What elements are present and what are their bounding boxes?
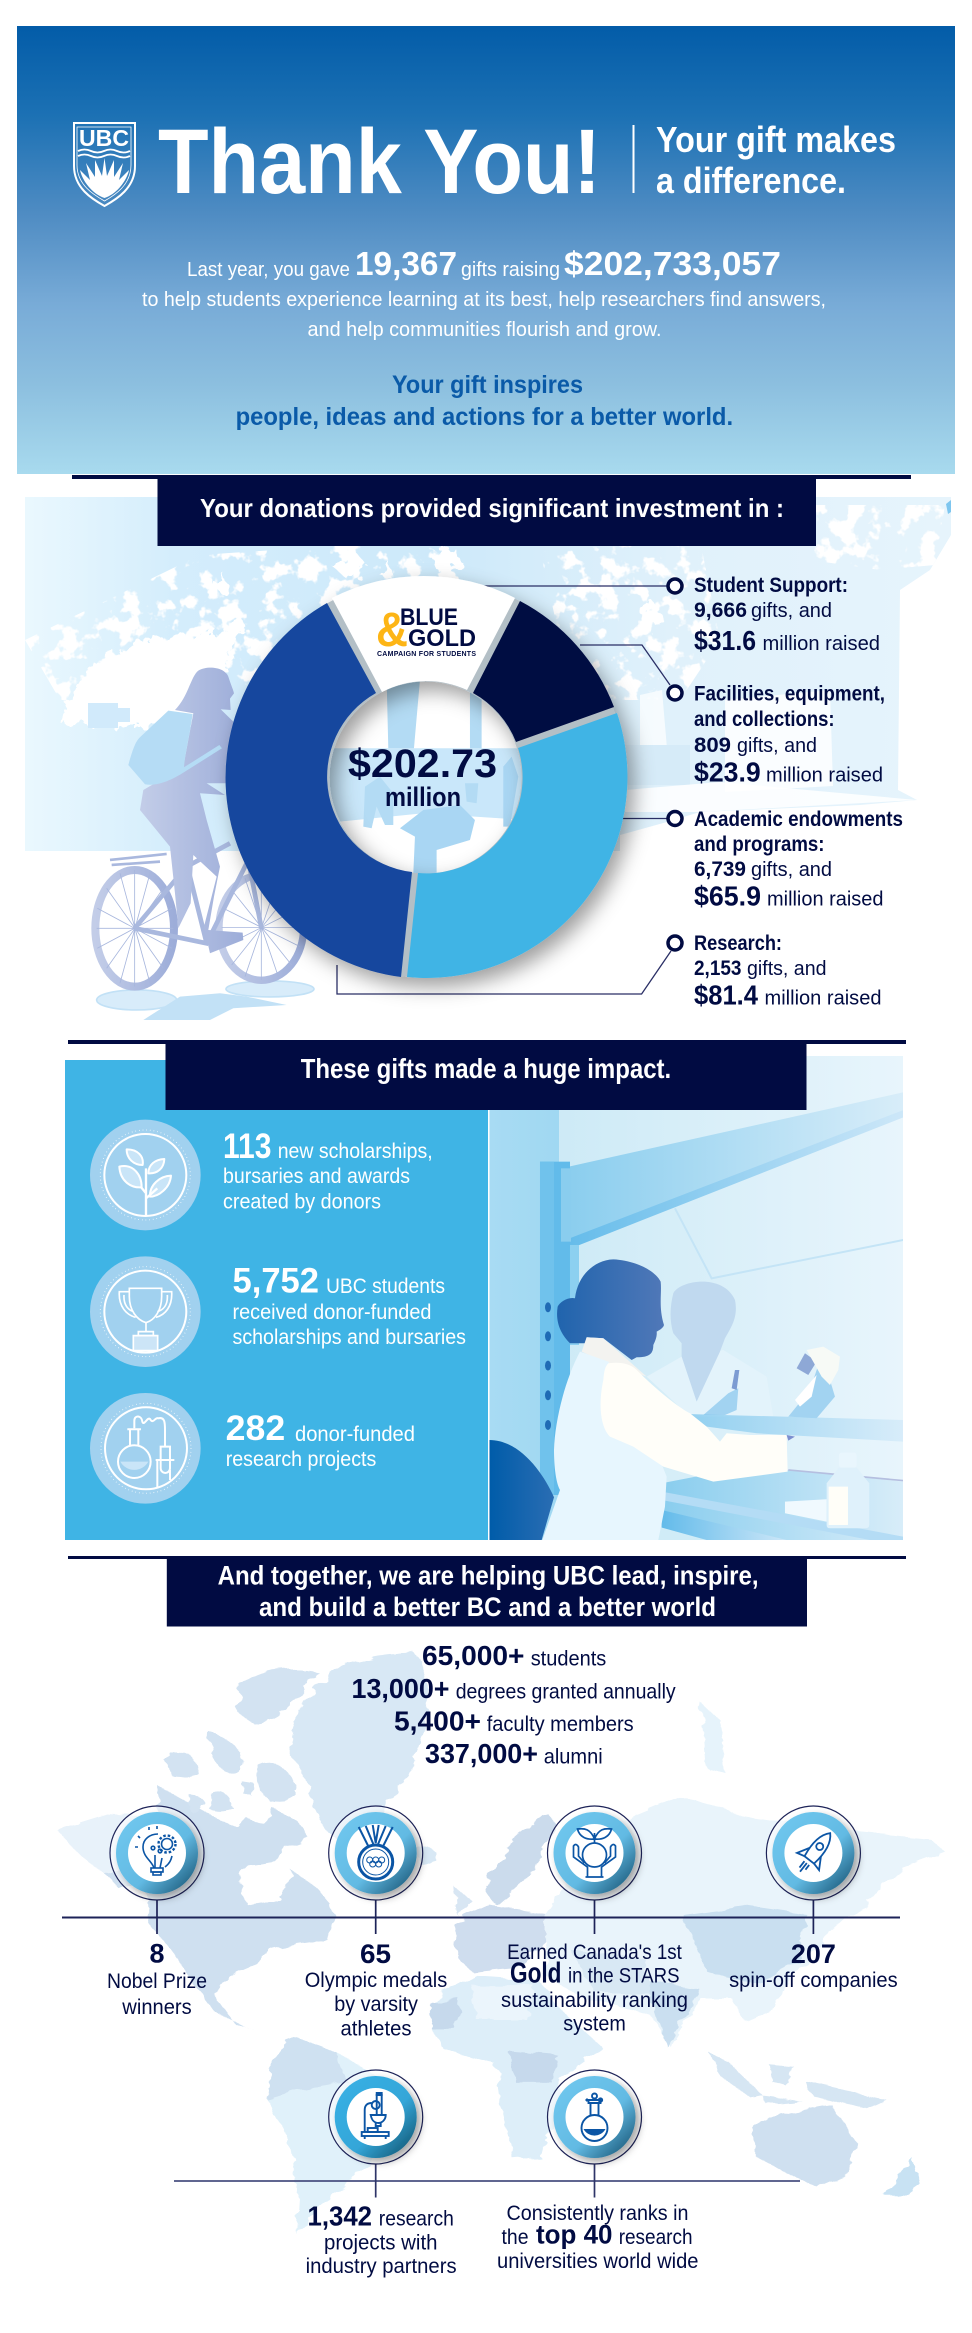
stat: STARS Gold: [501, 1941, 688, 2036]
legend: research: [668, 932, 882, 1010]
hood column: [540, 1162, 579, 1495]
segment: academic endowments: [407, 713, 627, 978]
stat: new scholarships: bursaries and awards: [223, 1165, 410, 1188]
intro text: to help students experience learning at its best, help researchers find answers,: [142, 289, 826, 311]
legend: facilities: [668, 682, 885, 788]
stat: new scholarships: 113: [223, 1127, 272, 1166]
stat: spin-off companies: [729, 1939, 898, 1992]
chair: [489, 1440, 554, 1540]
stat: world ranking: research: [619, 2226, 692, 2249]
stat: world ranking: Consistently ranks in: [506, 2202, 688, 2225]
tagline: Your gift makes: [656, 119, 896, 160]
leader lines: [337, 586, 671, 994]
timeline row two: [174, 2164, 800, 2198]
stat: STARS Gold: Gold: [510, 1958, 562, 1990]
bicycle wheels: [95, 870, 304, 987]
intro text: [142, 245, 826, 341]
stat: STARS Gold: Earned Canada's 1st: [507, 1941, 682, 1964]
donut total: million: [385, 782, 461, 812]
key numbers: degrees granted annually: [456, 1681, 676, 1704]
stat: Olympic medals: [305, 1939, 447, 2040]
tagline: [656, 119, 896, 201]
stat: Nobel Prize winners: [107, 1938, 207, 2019]
lab bench shelf: [687, 1414, 903, 1442]
legend: academic endowments: gifts, and: [751, 859, 832, 881]
stat: spin-off companies: spin-off companies: [729, 1969, 898, 1992]
speckled foliage: [25, 505, 945, 700]
key numbers: 337,000+: [425, 1738, 538, 1769]
stat: research projects: [226, 1409, 415, 1471]
stat: Olympic medals: by varsity: [334, 1993, 418, 2016]
key numbers: alumni: [544, 1746, 603, 1768]
stat: students funded: scholarships and bursaries: [232, 1326, 466, 1349]
timeline row one: [62, 1900, 900, 1934]
bench: [88, 703, 130, 728]
Blue and Gold campaign logo: [376, 604, 476, 658]
stat: Olympic medals: Olympic medals: [305, 1969, 447, 1992]
key numbers: 13,000+: [352, 1673, 450, 1704]
world map: [56, 1653, 946, 2232]
reagent bottle: [785, 1474, 870, 1528]
header banner: [17, 26, 955, 474]
legend: research: $81.4: [694, 980, 758, 1010]
section heading: together: And together, we are helping UBC lead, inspire,: [218, 1561, 759, 1591]
legend: academic endowments: Academic endowments: [694, 808, 903, 831]
legend: facilities: 809: [694, 734, 731, 757]
icon: trophy: [90, 1256, 201, 1367]
stat: new scholarships: [223, 1127, 433, 1214]
bicycle frame: [110, 843, 261, 943]
intro text: $202,733,057: [564, 245, 781, 282]
stat: students funded: [232, 1262, 466, 1349]
rider silhouette: [140, 668, 243, 953]
stat: Nobel Prize winners: Nobel Prize: [107, 1970, 207, 1993]
intro text: gifts raising: [461, 259, 560, 281]
UBC shield logo: [74, 123, 135, 206]
cyclist shadow: [97, 981, 314, 1020]
legend: student support: million raised: [762, 633, 880, 655]
donut chart: [226, 576, 627, 978]
inspires statement: Your gift inspires: [392, 371, 583, 399]
stat: research partnerships: 1,342: [308, 2200, 372, 2232]
backpack: [128, 711, 222, 785]
stat: world ranking: the: [502, 2226, 528, 2249]
segment: research: [226, 603, 412, 977]
Blue and Gold campaign logo: GOLD: [408, 625, 476, 652]
icon: microscope: [329, 2070, 423, 2164]
intro text: Last year, you gave: [187, 259, 350, 281]
stat: students funded: received donor-funded: [232, 1301, 432, 1324]
icon: Nobel light bulb: [110, 1806, 204, 1900]
section heading: impact: These gifts made a huge impact.: [301, 1053, 671, 1084]
icon: chemistry flask: [548, 2070, 642, 2164]
panel: impact stats: [65, 1060, 488, 1540]
stat: new scholarships: created by donors: [223, 1191, 381, 1214]
section heading: donations: [72, 475, 911, 546]
stat: Olympic medals: 65: [360, 1939, 391, 1969]
legend: facilities: and collections:: [694, 708, 834, 731]
legend: student support: $31.6: [694, 625, 756, 656]
inspires statement: [236, 371, 733, 431]
Blue and Gold campaign logo: BLUE: [400, 604, 458, 631]
stat: research partnerships: [306, 2200, 457, 2278]
legend: facilities: Facilities, equipment,: [694, 682, 885, 706]
foreground scientist: [542, 1259, 795, 1540]
legend: academic endowments: [668, 808, 903, 912]
stat: STARS Gold: in the STARS: [568, 1964, 680, 1988]
Blue and Gold campaign logo: CAMPAIGN FOR STUDENTS: [377, 651, 476, 658]
legend: student support: Student Support:: [694, 574, 848, 597]
UBC shield logo: UBC: [79, 125, 129, 151]
donut hole photo: [334, 682, 522, 874]
stat: new scholarships: new scholarships,: [278, 1140, 433, 1163]
stat: research projects: research projects: [226, 1448, 376, 1471]
stat: research partnerships: industry partners: [306, 2255, 457, 2278]
stat: spin-off companies: 207: [791, 1939, 836, 1969]
intro text: 19,367: [355, 245, 457, 282]
icon: flask and test tube: [90, 1393, 201, 1504]
stat: world ranking: top 40: [536, 2220, 612, 2250]
lab illustration: [489, 1056, 904, 1540]
legend: research: million raised: [764, 988, 882, 1010]
stat: students funded: UBC students: [326, 1275, 445, 1298]
legend: facilities: gifts, and: [737, 735, 817, 757]
right-hand tree trunks: [725, 690, 833, 792]
background photo: campus trees: [25, 497, 951, 857]
stat: STARS Gold: sustainability ranking: [501, 1989, 688, 2012]
section heading: together: [68, 1556, 906, 1626]
section heading: impact: [68, 1040, 906, 1110]
title: Thank You!: [158, 111, 601, 213]
legend: academic endowments: and programs:: [694, 833, 824, 856]
legend: academic endowments: 6,739: [694, 858, 746, 881]
legend: academic endowments: million raised: [767, 888, 884, 910]
segment: student support: [332, 576, 515, 692]
legend: student support: gifts, and: [751, 600, 832, 622]
icon: hands with sprout: [548, 1806, 642, 1900]
legend: student support: [668, 574, 880, 656]
donut total: $202.73: [348, 742, 497, 786]
stat: STARS Gold: system: [563, 2012, 626, 2036]
key numbers: [352, 1640, 676, 1769]
stat: world ranking: universities world wide: [497, 2250, 698, 2273]
legend: research: gifts, and: [747, 958, 826, 980]
legend: research: 2,153: [694, 957, 742, 980]
legend: research: Research:: [694, 932, 782, 955]
stat: research projects: donor-funded: [295, 1423, 415, 1446]
background scientist: [647, 1282, 840, 1418]
inspires statement: people, ideas and actions for a better world.: [236, 403, 733, 431]
stat: research partnerships: research: [379, 2208, 454, 2230]
stat: world ranking: [497, 2202, 698, 2273]
stat: Olympic medals: athletes: [340, 2018, 412, 2040]
stat: research projects: 282: [226, 1409, 285, 1448]
key numbers: faculty members: [487, 1713, 634, 1736]
intro text: and help communities flourish and grow.: [308, 319, 662, 341]
legend: facilities: $23.9: [694, 756, 761, 788]
section heading: together: and build a better BC and a better world: [259, 1592, 716, 1622]
legend: facilities: million raised: [766, 764, 883, 786]
cyclist: [95, 668, 304, 987]
stat: students funded: 5,752: [232, 1262, 319, 1300]
key numbers: 65,000+: [422, 1640, 524, 1671]
legend: student support: 9,666: [694, 599, 747, 622]
fume hood canopy: [561, 1092, 903, 1245]
segment: facilities: [473, 601, 614, 742]
key numbers: students: [531, 1648, 606, 1670]
donut segments: [226, 576, 627, 978]
icon: plant: [90, 1120, 201, 1230]
stat: Nobel Prize winners: winners: [121, 1996, 192, 2019]
section heading: donations: Your donations provided significant investment in :: [200, 493, 784, 523]
donut total: [348, 742, 497, 812]
icon: Olympic medal: [329, 1806, 423, 1900]
Blue and Gold campaign logo: &: [376, 604, 408, 657]
legend: academic endowments: $65.9: [694, 880, 761, 912]
stat: research partnerships: projects with: [324, 2232, 438, 2254]
key numbers: 5,400+: [394, 1706, 481, 1736]
stat: Nobel Prize winners: 8: [150, 1938, 164, 1968]
tagline: a difference.: [656, 160, 846, 201]
icon: rocket: [766, 1806, 860, 1900]
